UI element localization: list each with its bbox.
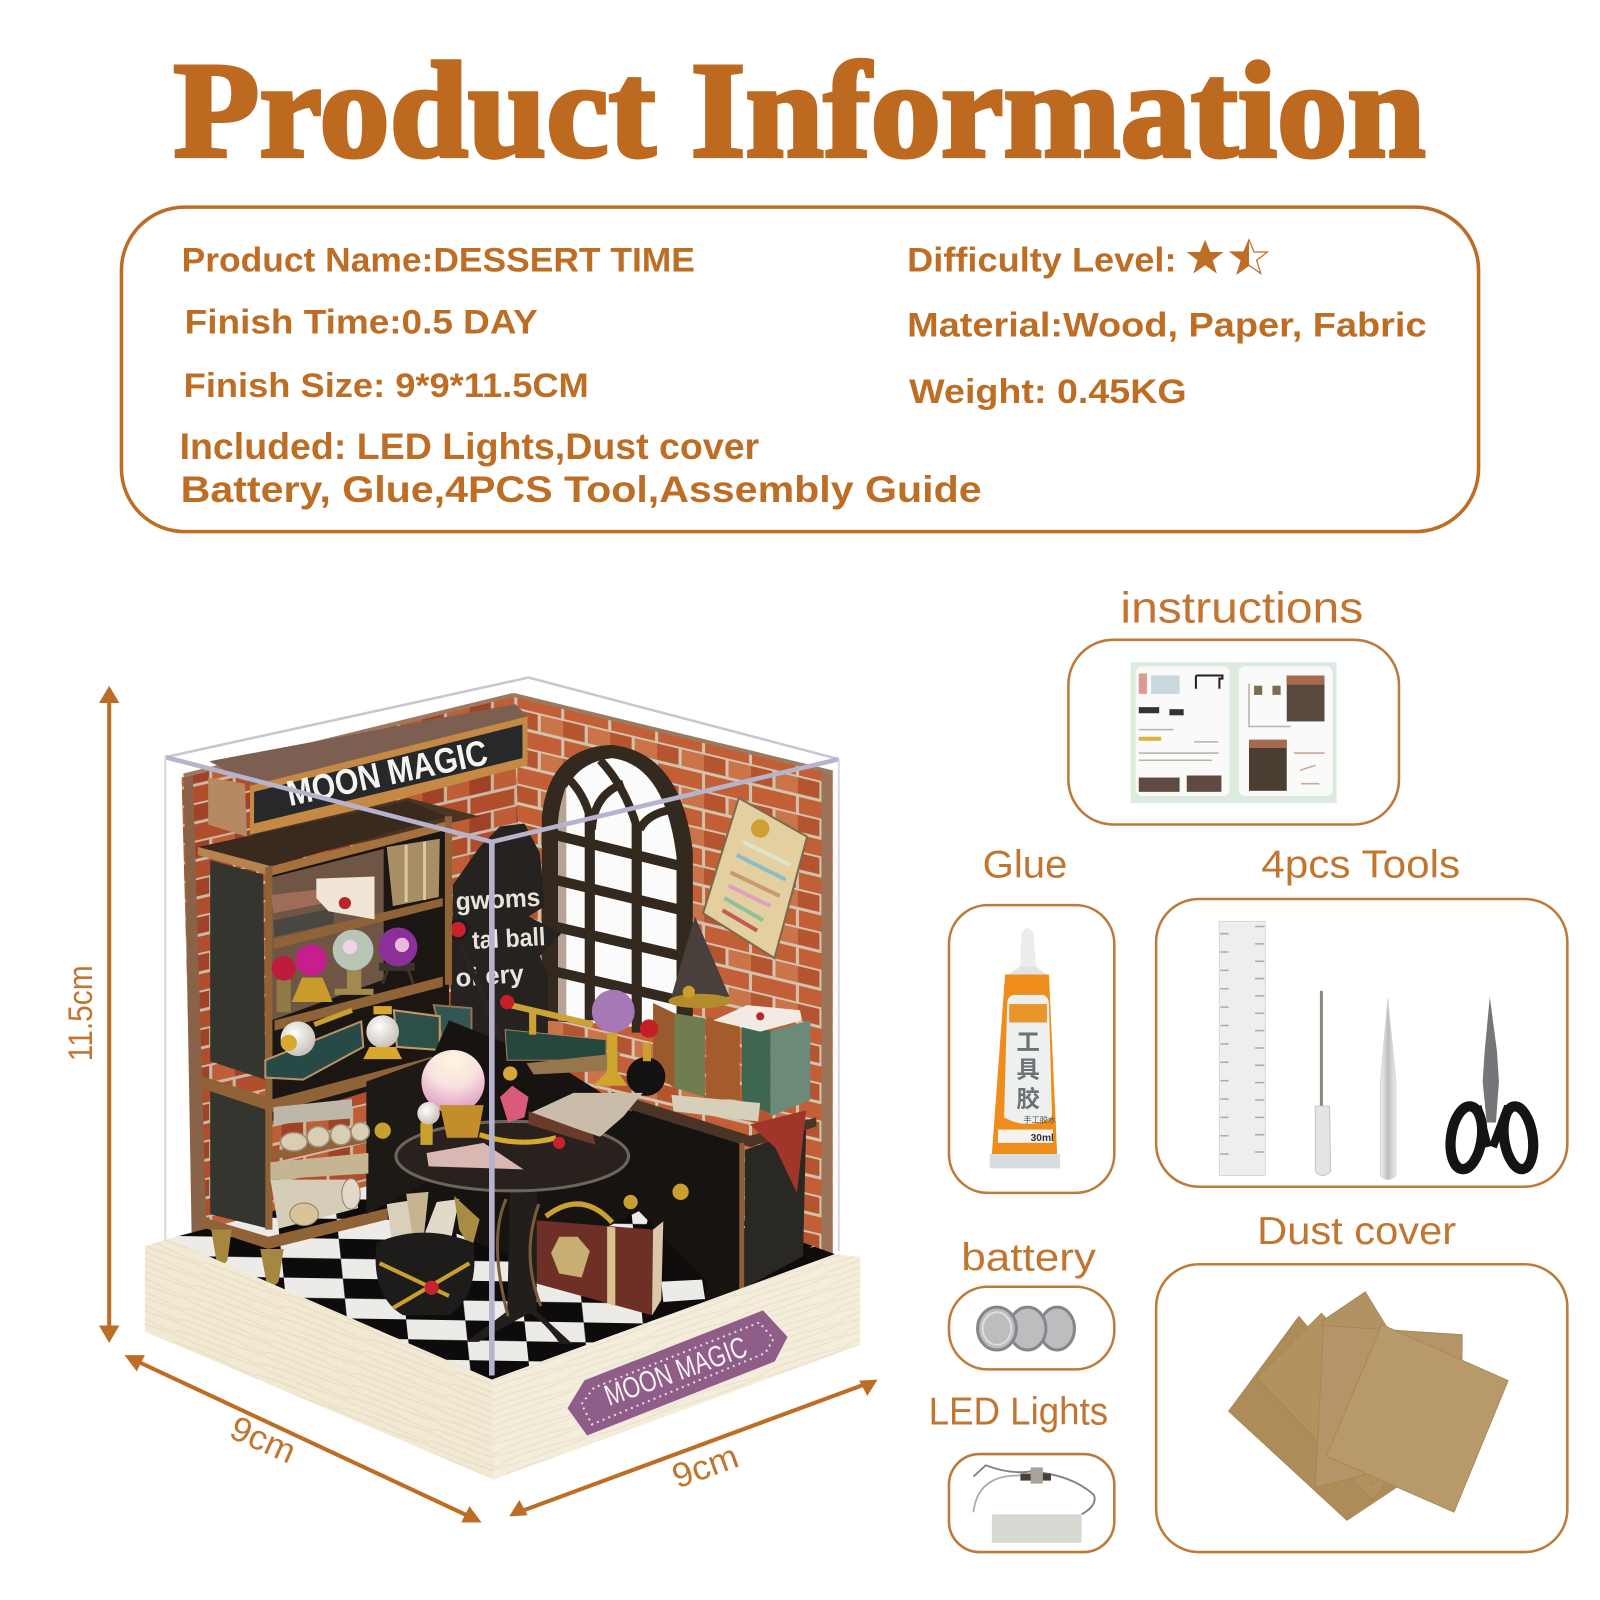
dust cover label: Dust cover [1257, 1210, 1456, 1253]
books and envelope [271, 839, 440, 937]
glue tube: 胶 [1016, 1086, 1040, 1112]
product name: Product Name:DESSERT TIME [182, 241, 695, 279]
upper dark side panel [210, 860, 265, 1080]
left bookcase [198, 704, 653, 1286]
flat teal box and telescope [500, 995, 620, 1074]
glue tube: 30ml [1031, 1133, 1054, 1144]
material: Material:Wood, Paper, Fabric [907, 307, 1427, 345]
glue label: Glue [983, 844, 1067, 887]
difficulty level [907, 240, 1267, 279]
bookcase legs [211, 1230, 284, 1286]
checker floor [168, 1143, 835, 1380]
dollhouse illustration [145, 678, 860, 1480]
panel: product specifications [121, 207, 1479, 532]
wall poster [703, 798, 807, 958]
glue label characters: 工 [1016, 1029, 1040, 1055]
weight: Weight: 0.45KG [909, 373, 1187, 411]
panel: led lights [929, 1390, 1114, 1552]
right width arrow [509, 1380, 878, 1516]
left width label: 9cm [224, 1409, 301, 1471]
pale floor tile [661, 1280, 705, 1302]
dark floor shadow [622, 1202, 835, 1316]
right brick wall [513, 695, 833, 1270]
led label: LED Lights [929, 1390, 1108, 1433]
kraft paper sheets [1229, 1292, 1508, 1520]
glue tube: 手工胶水 [1023, 1114, 1056, 1124]
shop sign [250, 716, 528, 839]
instruction booklet [1131, 662, 1337, 803]
title: Product Information [173, 34, 1426, 186]
panel: battery [949, 1236, 1114, 1369]
panel: dust cover [1156, 1210, 1567, 1552]
scissors [1447, 997, 1537, 1171]
left width arrow [124, 1355, 482, 1522]
right width label: 9cm [667, 1438, 744, 1496]
wooden base [145, 1239, 860, 1480]
difficulty level: Difficulty Level: [907, 241, 1177, 279]
height label: 11.5cm [62, 965, 100, 1061]
dark back area [388, 1020, 653, 1265]
shelf back [267, 824, 449, 1122]
wand with red gem [449, 920, 512, 1071]
arched window [542, 745, 693, 1033]
purple base plaque [566, 1309, 789, 1437]
hanging shop sign board: oi ery [455, 960, 526, 993]
button cells [978, 1307, 1074, 1350]
pink potion and gold chain [480, 1066, 565, 1149]
included items: Battery, Glue,4PCS Tool,Assembly Guide [181, 469, 982, 510]
included items: Included: LED Lights,Dust cover [180, 426, 759, 467]
hanging shop sign board: tal ball [471, 923, 546, 955]
glue tube: 具 [1016, 1057, 1040, 1083]
finish time: Finish Time:0.5 DAY [185, 304, 538, 342]
red cloth [750, 1110, 806, 1193]
crystal balls [271, 928, 417, 1012]
included items [180, 426, 982, 510]
witch hat [668, 916, 732, 1008]
tweezers [1381, 999, 1396, 1180]
cauldron with scrolls [376, 1192, 480, 1315]
panel: glue [949, 844, 1114, 1193]
teal boxes and pearls [265, 1005, 471, 1080]
lower door [366, 1058, 432, 1214]
scrolls [270, 1099, 369, 1229]
hanging shop sign board [449, 823, 561, 1082]
shop sign: MOON MAGIC [283, 732, 491, 814]
right cabinet [612, 1092, 816, 1300]
tools label: 4pcs Tools [1261, 844, 1460, 887]
brown suitcase [537, 1195, 663, 1315]
ruler [1219, 921, 1265, 1176]
row of books [653, 1003, 810, 1121]
screwdriver [1315, 991, 1331, 1176]
glowing crystal ball [417, 1050, 485, 1145]
clear acrylic cover [165, 678, 839, 1376]
wall end trims [184, 695, 833, 1270]
panel: 4pcs tools [1156, 844, 1567, 1187]
glue tube [990, 928, 1060, 1168]
finish size: Finish Size: 9*9*11.5CM [184, 367, 589, 405]
instructions label: instructions [1120, 583, 1363, 632]
height dimension arrow [99, 686, 119, 1343]
shop sign roof and plank [209, 704, 528, 786]
purple gem stand [592, 990, 665, 1096]
led wires and battery box [973, 1465, 1095, 1543]
round table [396, 1121, 629, 1344]
upper lit planks [250, 798, 480, 855]
uprights and shelves [200, 816, 481, 1249]
left brick wall [182, 695, 531, 1247]
cabinet top [198, 801, 447, 866]
battery label: battery [961, 1236, 1097, 1279]
purple base plaque: MOON MAGIC [600, 1331, 752, 1413]
open book [529, 1093, 643, 1145]
panel: instructions [1068, 583, 1399, 824]
lower dark side panel [210, 1090, 268, 1229]
sign words: gwoms [455, 884, 541, 916]
